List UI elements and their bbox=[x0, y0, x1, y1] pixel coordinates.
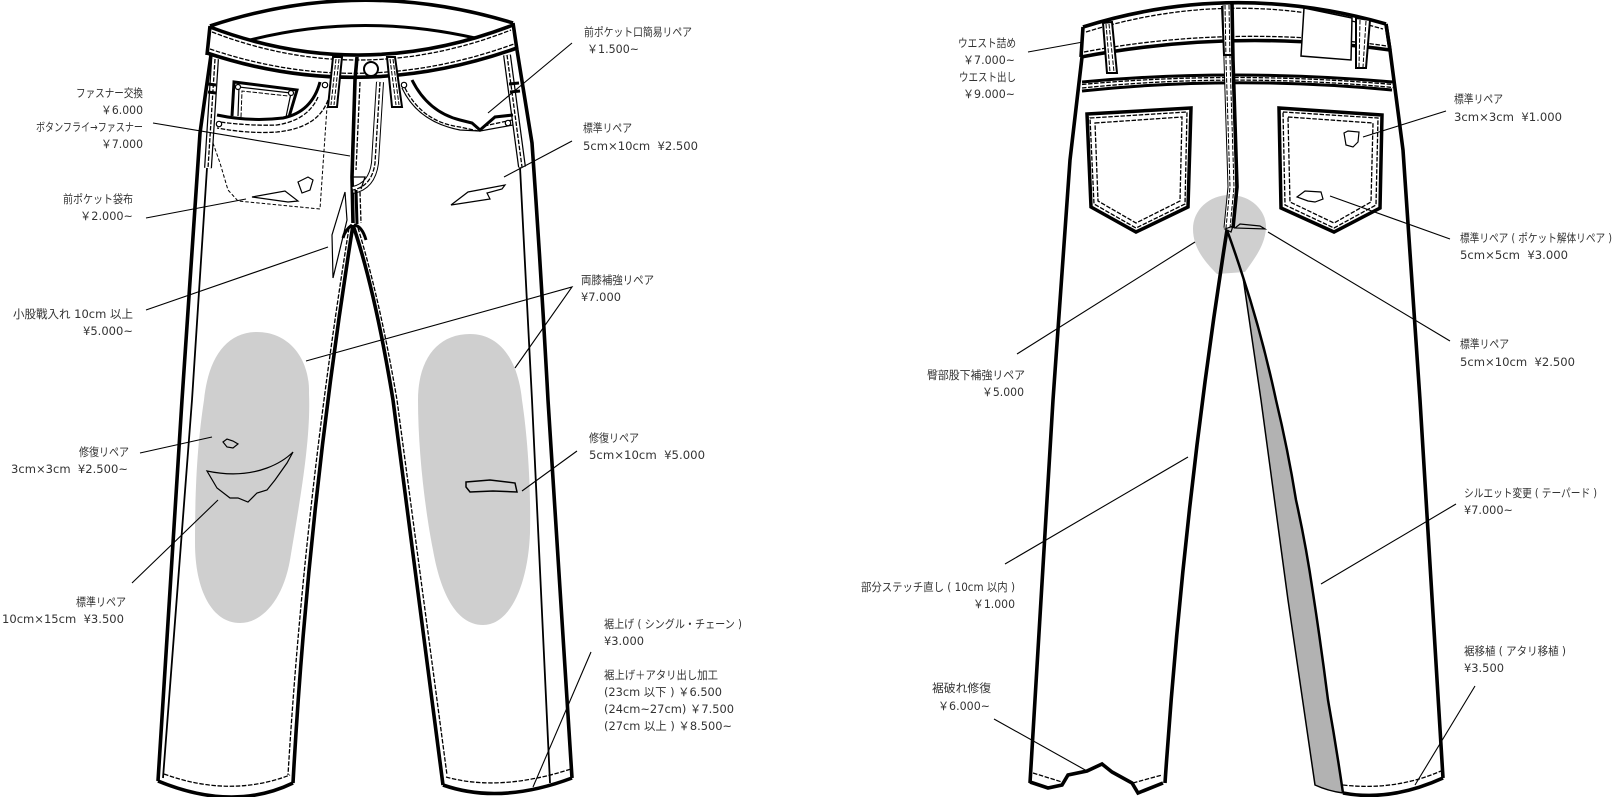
callout: standard repair crotch: 標準リペア bbox=[1460, 337, 1509, 351]
torn hem bbox=[1030, 764, 1163, 793]
callout: pocket bag: ￥2.000~ bbox=[80, 209, 133, 223]
callout: repair 5x10 knee: 5cm×10cm ¥5.000 bbox=[589, 448, 705, 462]
callouts for front jeans bbox=[2, 25, 742, 787]
callout: torn hem repair: 裾破れ修復 bbox=[932, 681, 992, 695]
callout: standard repair 5x10: 5cm×10cm ¥2.500 bbox=[583, 139, 698, 153]
right front pocket with tear bbox=[401, 80, 513, 131]
callout: hemming: ¥3.000 bbox=[604, 634, 644, 648]
callout: pocket opening bbox=[488, 25, 692, 113]
callout: hemming bbox=[533, 617, 742, 787]
side seam stitching bbox=[208, 55, 522, 168]
callout: zipper replacement: ボタンフライ→ファスナー bbox=[36, 120, 143, 134]
callout: hemming: (23cm 以下 ) ￥6.500 bbox=[604, 685, 722, 699]
belt loops bbox=[1103, 6, 1370, 73]
left front pocket and coin pocket bbox=[216, 82, 328, 132]
callout: partial stitch bbox=[861, 457, 1188, 611]
right knee reinforcement area bbox=[418, 334, 530, 625]
callout: standard repair 10cm: 標準リペア bbox=[76, 595, 126, 609]
callout: seat reinforcement bbox=[927, 242, 1195, 399]
callout: pocket opening: ￥1.500~ bbox=[587, 42, 639, 56]
right hem bbox=[1343, 771, 1443, 795]
callout: standard repair 10cm: 10cm×15cm ¥3.500 bbox=[2, 612, 124, 626]
waistband bbox=[207, 0, 517, 77]
callouts for back jeans bbox=[861, 36, 1612, 785]
callout: both knees: 両膝補強リペア bbox=[581, 273, 654, 287]
callout: standard repair 5x10: 標準リペア bbox=[583, 121, 632, 135]
callout: pocket opening: 前ポケット口簡易リペア bbox=[584, 25, 692, 39]
callout: standard repair pocket 3cm bbox=[1363, 92, 1562, 137]
repair marks bbox=[207, 177, 517, 502]
outer and inner leg outlines bbox=[158, 50, 572, 785]
callout: partial stitch: 部分ステッチ直し ( 10cm 以内 ) bbox=[861, 580, 1015, 594]
hems bbox=[158, 769, 572, 797]
callout: standard repair pocket 3cm: 3cm×3cm ¥1.000 bbox=[1454, 110, 1562, 124]
right back pocket bbox=[1279, 108, 1382, 232]
callout: repair 3cm bbox=[11, 437, 212, 476]
callout: hemming: (24cm~27cm) ￥7.500 bbox=[604, 702, 734, 716]
callout: both knees: ¥7.000 bbox=[581, 290, 621, 304]
callout: standard repair 5x10 bbox=[504, 121, 698, 177]
outer leg and inseam outlines bbox=[1030, 24, 1443, 793]
callout: seat reinforcement: ￥5.000 bbox=[982, 385, 1024, 399]
yoke bbox=[1082, 75, 1393, 91]
callout: hem transplant: ¥3.500 bbox=[1464, 661, 1504, 675]
taper alteration area bbox=[1243, 277, 1343, 793]
callout: pocket disassembly repair: 5cm×5cm ¥3.000 bbox=[1460, 248, 1568, 262]
callout: hemming: (27cm 以上 ) ￥8.500~ bbox=[604, 719, 732, 733]
callout: waist: ￥9.000~ bbox=[963, 87, 1015, 101]
callout: standard repair pocket 3cm: 標準リペア bbox=[1454, 92, 1503, 106]
fly bbox=[343, 57, 380, 240]
callout: repair 5x10 knee: 修復リペア bbox=[589, 431, 639, 445]
belt loops bbox=[328, 57, 402, 107]
back jeans drawing bbox=[1030, 3, 1443, 795]
callout: repair 3cm: 3cm×3cm ¥2.500~ bbox=[11, 462, 128, 476]
callout: crotch gusset bbox=[13, 247, 328, 338]
callout: hemming: 裾上げ ( シングル・チェーン ) bbox=[604, 617, 742, 631]
left back pocket bbox=[1087, 108, 1191, 232]
callout: torn hem repair bbox=[932, 681, 1087, 771]
callout: waist: ウエスト出し bbox=[959, 70, 1016, 84]
leather patch bbox=[1301, 8, 1352, 60]
callout: pocket bag bbox=[63, 192, 246, 223]
center seam bbox=[1225, 3, 1237, 232]
taper left edge bbox=[1243, 277, 1343, 793]
callout: silhouette change bbox=[1321, 486, 1597, 584]
callout: seat reinforcement: 臀部股下補強リペア bbox=[927, 368, 1025, 382]
button bbox=[364, 62, 378, 76]
callout: silhouette change: ¥7.000~ bbox=[1464, 503, 1513, 517]
callout: waist: ウエスト詰め bbox=[958, 36, 1016, 50]
callout: zipper replacement: ￥7.000 bbox=[101, 137, 143, 151]
callout: crotch gusset: 小股戰入れ 10cm 以上 bbox=[13, 307, 133, 321]
left knee reinforcement area bbox=[195, 332, 309, 623]
callout: standard repair 10cm bbox=[2, 500, 218, 626]
callout: zipper replacement: ファスナー交換 bbox=[76, 86, 143, 100]
callout: crotch gusset: ¥5.000~ bbox=[83, 324, 133, 338]
callout: zipper replacement bbox=[36, 86, 350, 156]
front jeans drawing bbox=[158, 0, 572, 797]
pocket bag outline bbox=[213, 107, 327, 209]
callout: pocket bag: 前ポケット袋布 bbox=[63, 192, 133, 206]
waistband bbox=[1081, 3, 1390, 57]
callout: hem transplant bbox=[1415, 644, 1566, 785]
callout: both knees bbox=[306, 273, 654, 368]
callout: partial stitch: ￥1.000 bbox=[973, 597, 1015, 611]
callout: standard repair crotch: 5cm×10cm ¥2.500 bbox=[1460, 355, 1575, 369]
callout: zipper replacement: ￥6.000 bbox=[101, 103, 143, 117]
callout: torn hem repair: ￥6.000~ bbox=[938, 699, 990, 713]
callout: repair 3cm: 修復リペア bbox=[79, 445, 129, 459]
callout: hemming: 裾上げ＋アタリ出し加工 bbox=[604, 668, 718, 682]
callout: pocket disassembly repair bbox=[1330, 196, 1612, 262]
repair marks bbox=[1235, 131, 1359, 229]
callout: repair 5x10 knee bbox=[522, 431, 705, 491]
seat reinforcement area bbox=[1193, 195, 1266, 274]
callout: hem transplant: 裾移植 ( アタリ移植 ) bbox=[1464, 644, 1566, 658]
callout: standard repair crotch bbox=[1268, 232, 1575, 369]
callout: waist: ￥7.000~ bbox=[963, 53, 1015, 67]
callout: waist bbox=[958, 36, 1083, 101]
